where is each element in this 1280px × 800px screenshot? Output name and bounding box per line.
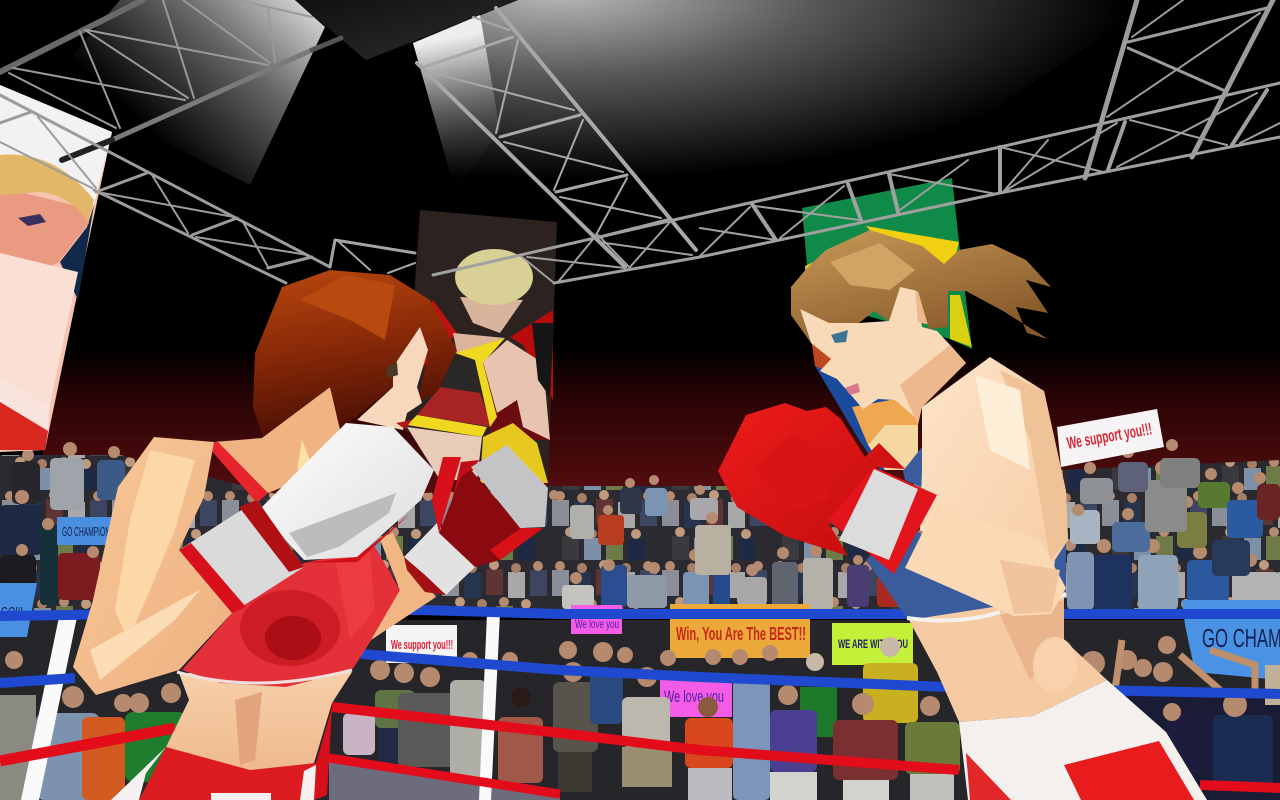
back forearm — [352, 533, 436, 670]
sign: we love you pink lower: We love you — [664, 687, 724, 706]
hair — [253, 270, 457, 437]
sign: we support you: We support you!!! — [1065, 419, 1153, 453]
abdomen — [166, 672, 352, 777]
neck — [214, 387, 342, 493]
hair — [791, 230, 1051, 343]
spotlight cones — [60, 0, 1160, 230]
sign: go champion left — [57, 517, 112, 545]
left stand figures — [0, 442, 125, 605]
sign: go champion right — [1182, 600, 1280, 680]
back — [920, 357, 1068, 612]
sign: we are with you — [832, 623, 913, 665]
ring ropes — [0, 610, 1280, 794]
hem — [907, 594, 1066, 620]
sign: we are with you: WE ARE WITH YOU — [838, 637, 908, 651]
lower stand wall — [0, 620, 1280, 800]
lower right figures — [1081, 636, 1280, 800]
poster: right Brazil flag — [802, 178, 972, 470]
sign: go left edge: GO!!! — [1, 604, 23, 621]
red glove — [718, 403, 905, 556]
shorts — [111, 747, 316, 800]
sign: we support you lower — [386, 625, 457, 663]
right stand figures — [1064, 439, 1280, 610]
poster: center blonde boxer — [405, 210, 557, 483]
face — [357, 327, 428, 430]
sign: we love you pink upper: We love you — [575, 617, 619, 631]
near arm — [73, 437, 232, 695]
lower crowd — [0, 636, 1280, 800]
neck and face — [800, 284, 966, 420]
ring canvas — [329, 760, 560, 800]
sign: we support you lower: We support you!!! — [391, 637, 453, 652]
sign: we love you pink upper — [571, 605, 622, 634]
red top — [177, 442, 400, 687]
second glove — [432, 445, 548, 567]
abdomen — [909, 596, 1107, 722]
right boxer — [718, 230, 1207, 800]
ring posts — [21, 613, 500, 800]
truss: top right — [1085, 0, 1273, 178]
truss: small back section — [330, 240, 415, 273]
blue top — [866, 447, 1066, 618]
sign: we love you pink lower — [660, 680, 732, 717]
sign: go champion left: GO CHAMPION — [62, 524, 110, 539]
arm — [905, 503, 1066, 616]
right wrap — [404, 523, 475, 595]
truss: top left — [0, 0, 341, 160]
left boxer — [73, 270, 548, 800]
lower center left figures — [343, 652, 543, 783]
lower left figures — [0, 651, 186, 800]
signs — [0, 409, 1280, 717]
lower center figures — [553, 637, 960, 800]
center stand figures — [549, 475, 899, 610]
sign: go left edge — [0, 583, 37, 637]
truss: long span — [433, 83, 1280, 283]
trusses — [0, 0, 1280, 283]
upper crowd — [0, 439, 1280, 615]
truss: left diagonal — [0, 95, 330, 283]
sign: we support you — [1057, 409, 1164, 467]
left wrap — [179, 500, 304, 613]
poster: left blonde boxer — [0, 85, 112, 452]
wrap — [828, 467, 937, 574]
truss: center diagonal — [417, 8, 696, 267]
red curtain — [40, 350, 1280, 500]
white glove — [262, 423, 434, 563]
sign: win you are the best: Win, You Are The BEST!! — [676, 624, 806, 644]
shorts — [959, 680, 1207, 800]
sign: win you are the best — [670, 604, 810, 658]
